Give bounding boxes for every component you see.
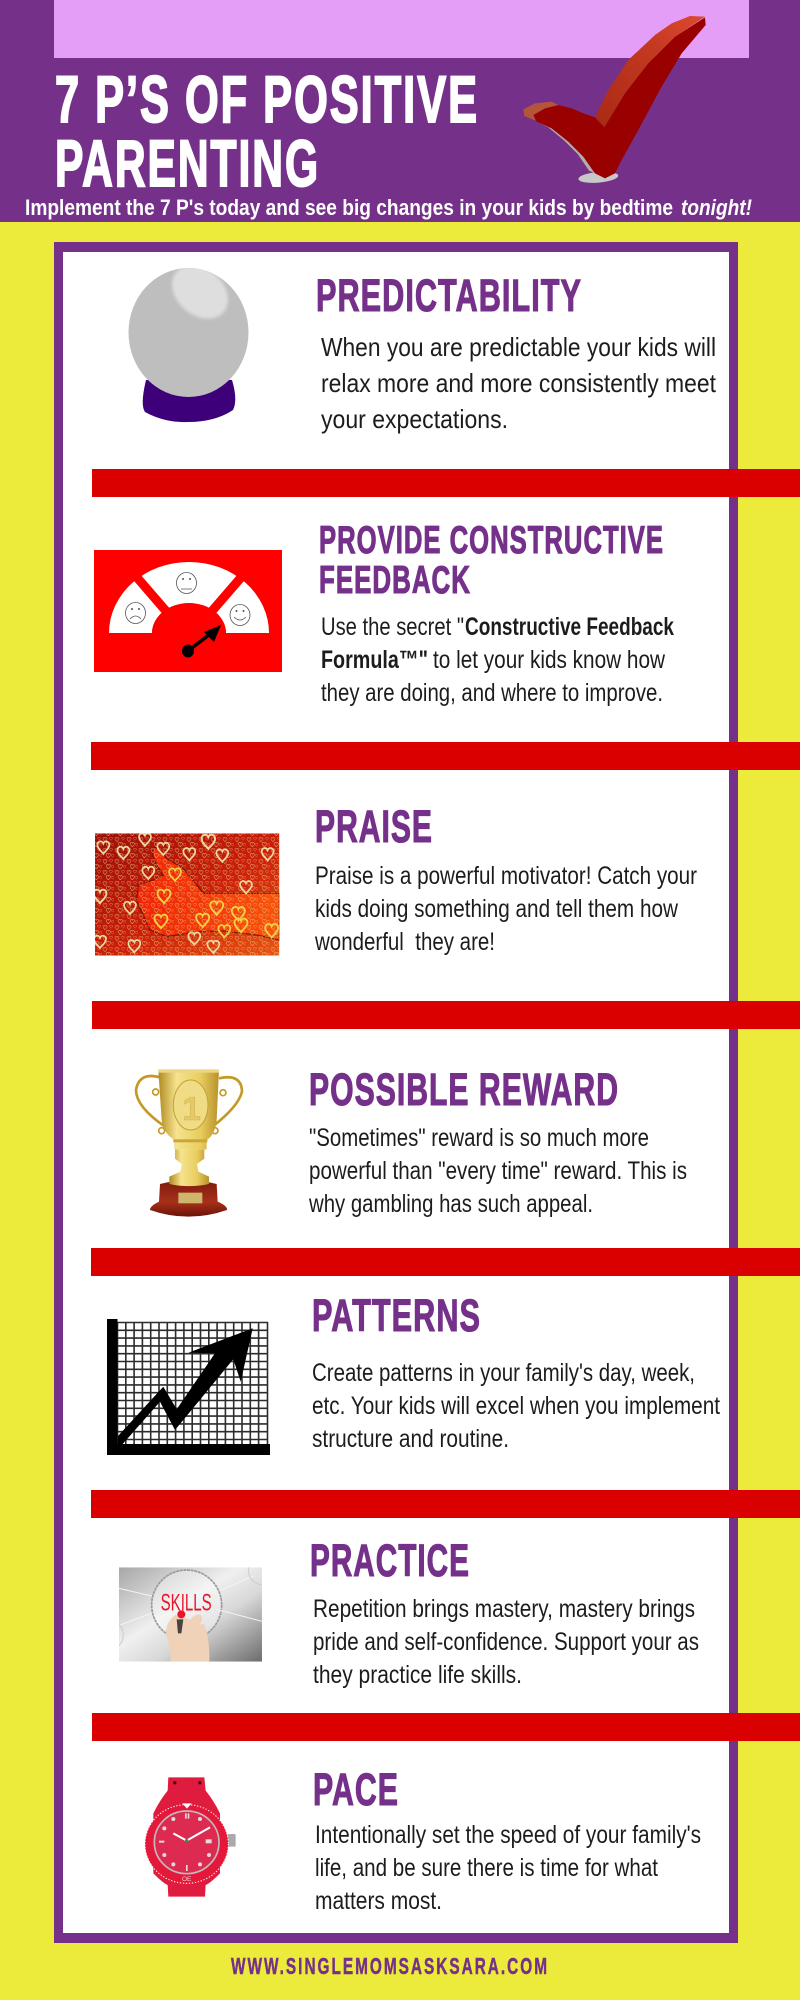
heading: PATTERNS — [312, 1290, 481, 1341]
body text — [321, 332, 717, 434]
body text: to let your kids know how — [433, 646, 666, 674]
body text: Repetition brings mastery, mastery brings — [313, 1595, 695, 1623]
heading: PREDICTABILITY — [316, 270, 582, 321]
heading: PACE — [313, 1764, 399, 1815]
heading: PRAISE — [315, 801, 433, 852]
heading: POSSIBLE REWARD — [309, 1064, 619, 1115]
body text: structure and routine. — [312, 1425, 509, 1453]
title — [55, 62, 479, 200]
body text — [313, 1595, 699, 1689]
panel: praise — [94, 801, 697, 956]
title: 7 P’S OF POSITIVE — [55, 62, 479, 136]
body text: Constructive Feedback — [465, 613, 674, 641]
body text — [308, 1124, 687, 1218]
body text: your expectations. — [321, 404, 508, 434]
body text: wonderful they are! — [314, 928, 495, 956]
panel frame — [54, 242, 738, 1943]
body text — [315, 1821, 701, 1915]
pink top band — [54, 0, 749, 58]
body text: "Sometimes" reward is so much more — [309, 1124, 649, 1152]
panel: possible reward — [136, 1064, 687, 1218]
body text: powerful than "every time" reward. This is — [309, 1157, 687, 1185]
body text: pride and self-confidence. Support your as — [313, 1628, 699, 1656]
title: PARENTING — [55, 126, 320, 200]
icon: gold trophy: 1 — [182, 1091, 201, 1128]
body text: relax more and more consistently meet — [321, 368, 717, 398]
footer url: WWW.SINGLEMOMSASKSARA.COM — [231, 1953, 549, 1979]
body text — [314, 862, 697, 956]
icon: thumbs up with hearts — [94, 833, 279, 956]
body text: Create patterns in your family's day, week, — [312, 1359, 695, 1387]
icon: red wristwatch — [145, 1777, 236, 1897]
body text: they practice life skills. — [313, 1661, 522, 1689]
body text: kids doing something and tell them how — [315, 895, 679, 923]
body text: Intentionally set the speed of your family's — [315, 1821, 701, 1849]
body text: Formula™" — [321, 646, 428, 674]
panel: practice — [119, 1544, 698, 1688]
icon: feedback gauge — [94, 550, 282, 672]
icon: gold trophy — [136, 1069, 242, 1217]
header banner — [0, 0, 800, 222]
heading: PRACTICE — [310, 1535, 470, 1586]
icon: red wristwatch: OE — [182, 1876, 192, 1883]
body text: etc. Your kids will excel when you implement — [312, 1392, 720, 1420]
divider bars — [91, 469, 800, 1741]
icon: rising line chart — [107, 1319, 270, 1455]
panel: patterns — [107, 1290, 720, 1455]
icon: hand writing skills — [119, 1567, 262, 1662]
icon: hand writing skills: SKILLS — [161, 1590, 212, 1617]
body text — [312, 1359, 720, 1453]
panel: pace — [145, 1764, 701, 1915]
heading: FEEDBACK — [319, 559, 471, 602]
panel: predictability — [128, 254, 717, 434]
heading — [319, 519, 664, 602]
body text: Praise is a powerful motivator! Catch your — [315, 862, 697, 890]
panel: provide constructive feedback — [94, 519, 674, 707]
body text: matters most. — [315, 1887, 442, 1915]
subtitle: Implement the 7 P's today and see big changes in your kids by bedtime — [25, 195, 673, 220]
body text: When you are predictable your kids will — [321, 332, 716, 362]
icon: crystal ball — [128, 254, 248, 422]
icon: red check mark — [523, 16, 706, 184]
body text: life, and be sure there is time for what — [315, 1854, 658, 1882]
body text: why gambling has such appeal. — [308, 1190, 593, 1218]
body text: Use the secret " — [321, 613, 464, 641]
body text — [321, 613, 674, 707]
body text: they are doing, and where to improve. — [321, 679, 663, 707]
subtitle: tonight! — [681, 195, 752, 220]
